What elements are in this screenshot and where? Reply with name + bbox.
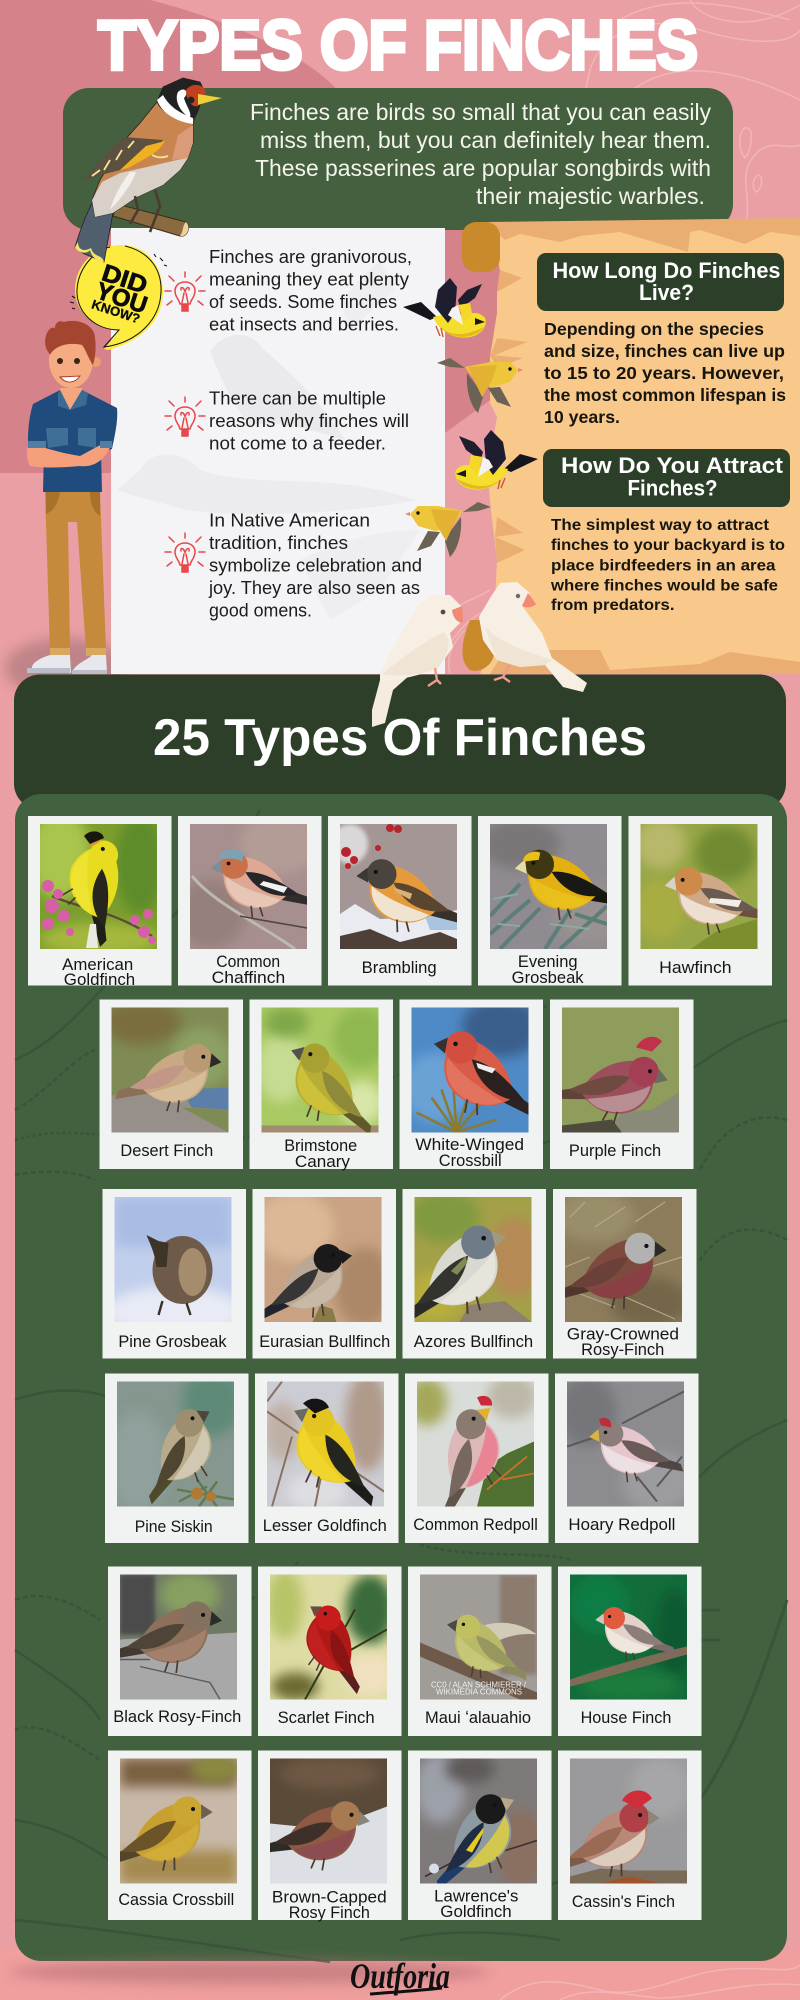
section header bar [14, 674, 786, 810]
card: American Goldfinch: American [62, 956, 133, 974]
card: American Goldfinch: Goldfinch [64, 971, 135, 989]
attract text: The simplest way to attract [551, 517, 770, 534]
fact 3: In Native American [209, 510, 370, 530]
fact 2: reasons why finches will [209, 411, 409, 431]
card: Purple Finch: Purple Finch [569, 1142, 661, 1160]
card: Cassin's Finch [554, 1750, 702, 1920]
card: Common Chaffinch [175, 814, 322, 987]
card: Evening Grosbeak: Grosbeak [512, 969, 584, 987]
attract text: from predators. [551, 597, 674, 614]
lifespan text: 10 years. [544, 407, 620, 427]
panel: intro banner [63, 88, 733, 230]
card: Scarlet Finch: Scarlet Finch [278, 1709, 375, 1727]
card: House Finch: House Finch [581, 1709, 671, 1727]
logo: Outforia: Outforia [350, 1956, 450, 1996]
card: Azores Bullfinch: Azores Bullfinch [414, 1333, 533, 1351]
card: Gray-Crowned Rosy-Finch: Gray-Crowned [567, 1326, 679, 1344]
card: Gray-Crowned Rosy-Finch: Rosy-Finch [581, 1341, 664, 1359]
heading: how long: Live? [639, 280, 694, 305]
card: Brown-Capped Rosy Finch: Rosy Finch [289, 1904, 370, 1922]
card: Purple Finch [550, 1000, 694, 1169]
illustration: flying finch two [437, 358, 523, 413]
card: Common Chaffinch: Common [216, 953, 280, 971]
sketch pattern [15, 810, 787, 1962]
did you know text: YOU [93, 278, 150, 319]
card: Common Redpoll [402, 1374, 548, 1543]
card: Common Redpoll: Common Redpoll [413, 1516, 538, 1534]
card: Brimstone Canary: Brimstone [284, 1137, 357, 1155]
heading: how to attract: Finches? [628, 476, 718, 500]
illustration: man with crossed arms [27, 321, 117, 674]
card: Hawfinch: Hawfinch [659, 959, 732, 977]
card: Maui alauahio: WIKIMEDIA COMMONS [436, 1688, 522, 1696]
card: Scarlet Finch [258, 1566, 402, 1736]
fact 2 [165, 388, 409, 454]
fact 1: Finches are granivorous, [209, 247, 412, 267]
fact 3 [165, 510, 422, 620]
title: TYPES OF FINCHES [98, 6, 698, 84]
card: Gray-Crowned Rosy-Finch [553, 1189, 696, 1359]
card: Common Chaffinch: Chaffinch [212, 969, 285, 987]
intro text: Finches are birds so small that you can easily [250, 99, 711, 125]
icon: lightbulb [165, 397, 205, 436]
card: White-Winged Crossbill: White-Winged [415, 1136, 524, 1154]
attract text: place birdfeeders in an area [551, 558, 776, 574]
card: Maui alauahio: CC0 / ALAN SCHMIERER / [431, 1680, 527, 1690]
card: Desert Finch [100, 1000, 243, 1169]
panel: scroll [462, 218, 800, 674]
card: Hawfinch [628, 816, 772, 986]
fact 3: good omens. [209, 600, 312, 620]
lifespan text: and size, finches can live up [544, 341, 785, 361]
illustration: flying finch one [403, 278, 486, 338]
heading: how to attract: How Do You Attract [561, 453, 784, 478]
fact 1: meaning they eat plenty [209, 270, 409, 290]
card: Hoary Redpoll: Hoary Redpoll [568, 1516, 675, 1534]
did you know text [90, 259, 151, 326]
fact 1 [165, 247, 412, 334]
white finch left [372, 595, 463, 727]
card: Azores Bullfinch [386, 1189, 546, 1358]
scroll roll top [462, 222, 500, 272]
card: American Goldfinch [28, 809, 172, 989]
card: Maui alauahio: Maui ʻalauahio [425, 1709, 531, 1727]
intro text [250, 99, 711, 209]
attract text: finches to your backyard is to [551, 537, 785, 554]
intro text: miss them, but you can definitely hear them. [260, 127, 711, 153]
card: Eurasian Bullfinch [250, 1189, 396, 1358]
icon: lightbulb [165, 272, 205, 311]
faint bird watermark [117, 260, 420, 620]
card: Brimstone Canary: Canary [295, 1153, 351, 1171]
lifespan text: Depending on the species [544, 319, 764, 339]
section heading: 25 Types Of Finches [153, 709, 647, 767]
attract text: where finches would be safe [550, 578, 778, 594]
card: White-Winged Crossbill: Crossbill [439, 1152, 502, 1170]
card: House Finch [558, 1566, 702, 1736]
fact 2: There can be multiple [209, 388, 386, 408]
card: Cassia Crossbill: Cassia Crossbill [118, 1891, 234, 1909]
card: Evening Grosbeak [478, 816, 625, 987]
card: Black Rosy-Finch: Black Rosy-Finch [113, 1708, 241, 1726]
card: Cassin's Finch: Cassin's Finch [572, 1893, 675, 1911]
card: Brown-Capped Rosy Finch: Brown-Capped [272, 1888, 387, 1906]
heading: how long [537, 253, 784, 311]
fact 1: eat insects and berries. [209, 314, 399, 334]
card: Maui alauahio [408, 1566, 552, 1736]
heading: how to attract [543, 449, 790, 507]
card: Eurasian Bullfinch: Eurasian Bullfinch [259, 1333, 390, 1351]
fact 3: symbolize celebration and [209, 556, 422, 576]
card: Brambling: Brambling [362, 959, 437, 977]
card: Lesser Goldfinch: Lesser Goldfinch [263, 1517, 387, 1535]
card: Pine Grosbeak: Pine Grosbeak [118, 1333, 227, 1351]
intro text: their majestic warbles. [476, 183, 705, 209]
panel: finch gallery [15, 794, 787, 1962]
card: Lesser Goldfinch [255, 1372, 401, 1543]
fact 3: joy. They are also seen as [208, 578, 420, 598]
panel: lifespan [537, 253, 786, 427]
card: Pine Siskin: Pine Siskin [135, 1518, 213, 1536]
card: Lawrence's Goldfinch [408, 1750, 552, 1921]
card: Evening Grosbeak: Evening [518, 953, 578, 971]
illustration: flying finch three [455, 430, 538, 490]
card: Pine Siskin [105, 1366, 248, 1543]
card: Lawrence's Goldfinch: Goldfinch [440, 1903, 512, 1921]
shadow below gallery [10, 1960, 490, 1984]
card: White-Winged Crossbill [400, 998, 550, 1170]
card: Pine Grosbeak [102, 1189, 246, 1358]
lifespan text: the most common lifespan is [544, 385, 786, 405]
icon: lightbulb [165, 533, 205, 572]
card: Desert Finch: Desert Finch [120, 1142, 213, 1160]
card: Brimstone Canary [250, 1000, 394, 1171]
shadow under man [5, 638, 125, 698]
fact 3: tradition, finches [209, 533, 348, 553]
did you know text: KNOW? [90, 297, 142, 326]
callout: did you know [70, 245, 167, 350]
panel: did you know facts [111, 228, 445, 674]
heading: how long: How Long Do Finches [552, 258, 780, 283]
attract text [550, 517, 785, 614]
intro text: These passerines are popular songbirds with [255, 155, 711, 181]
card: Brambling [328, 816, 472, 986]
scroll roll bottom [462, 620, 494, 671]
lifespan text [544, 319, 786, 427]
lifespan text: to 15 to 20 years. However, [544, 363, 784, 383]
fact 1: of seeds. Some finches [209, 292, 397, 312]
card: Hoary Redpoll [555, 1374, 698, 1543]
illustration: white finches [372, 582, 587, 727]
did you know text: DID [98, 259, 151, 299]
panel: attract [543, 449, 790, 614]
card: Cassia Crossbill [107, 1750, 252, 1920]
card: Black Rosy-Finch [108, 1566, 252, 1736]
card: Lawrence's Goldfinch: Lawrence's [434, 1888, 518, 1906]
icon: goldfinch on branch [75, 78, 222, 262]
card: Brown-Capped Rosy Finch [258, 1750, 402, 1922]
white finch right [479, 582, 587, 692]
fact 2: not come to a feeder. [209, 434, 386, 454]
illustration: flying finch four [405, 502, 491, 557]
